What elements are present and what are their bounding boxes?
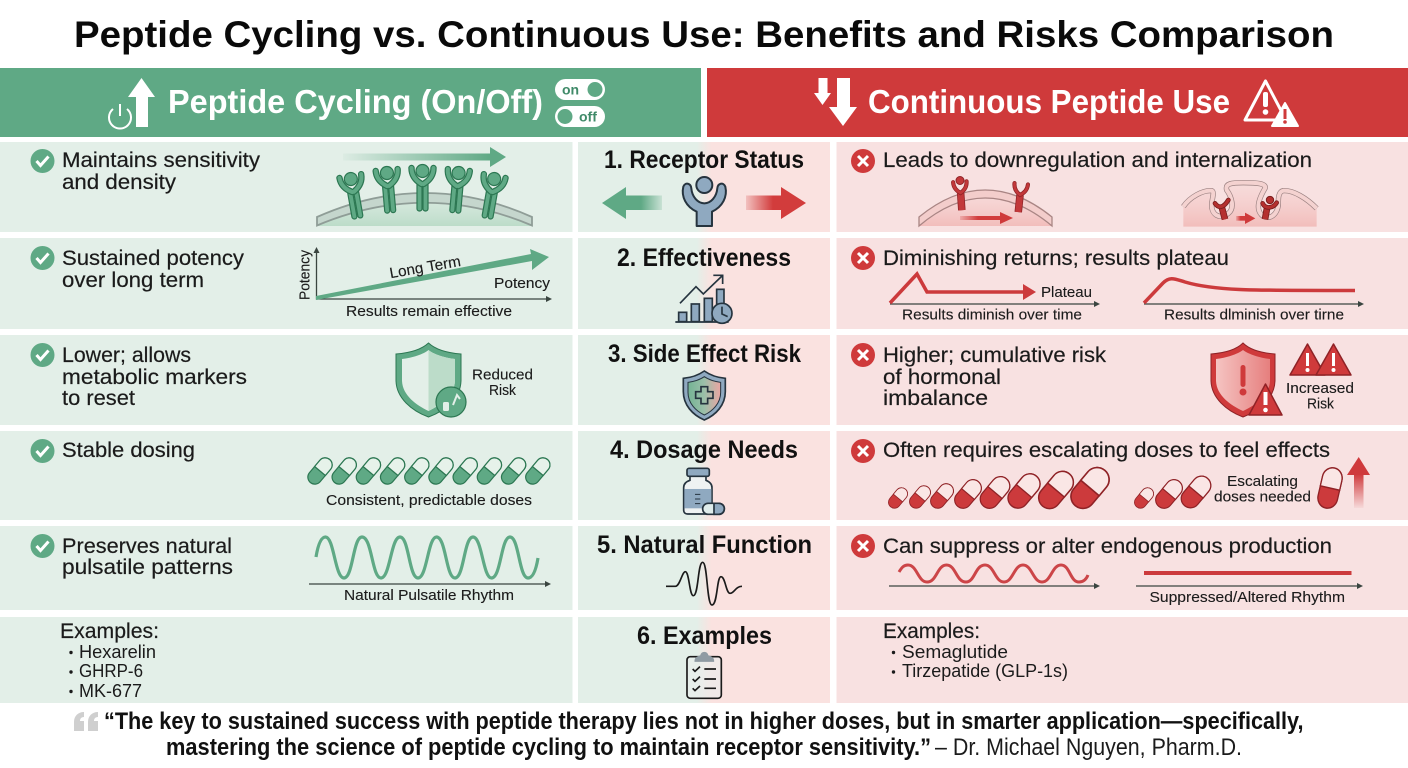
label: reduced risk: Reduced bbox=[472, 366, 533, 384]
chart: potency over long term bbox=[296, 247, 552, 320]
chart: potency over long term: Results remain effective bbox=[346, 303, 512, 320]
panel: cycling header bbox=[0, 68, 701, 137]
heading: side effect risk: 3. Side Effect Risk bbox=[608, 340, 801, 368]
icon: check bbox=[30, 343, 54, 367]
chart: plateau: Plateau bbox=[1041, 284, 1092, 301]
icon: cross bbox=[851, 246, 875, 270]
panel: cycling side effect risk bbox=[0, 335, 572, 425]
text: endogenous production: Can suppress or alter endogenous production bbox=[883, 534, 1332, 558]
panel: center effectiveness bbox=[578, 238, 830, 329]
icon: large capsule bbox=[1316, 466, 1344, 510]
icon: red shield bbox=[1211, 343, 1282, 417]
text: sensitivity: and density bbox=[62, 170, 176, 194]
icon: pulse wave bbox=[666, 562, 742, 605]
panel: cycling effectiveness bbox=[0, 238, 572, 329]
text: escalating doses: Often requires escalating doses to feel effects bbox=[883, 438, 1330, 462]
heading: dosage needs: 4. Dosage Needs bbox=[610, 436, 798, 464]
text: pulsatile patterns: pulsatile patterns bbox=[62, 555, 233, 579]
chart: natural pulsatile wave bbox=[309, 537, 551, 604]
chart: diminishing curve: Results dlminish over tirne bbox=[1164, 306, 1344, 324]
panel: cycling dosage bbox=[0, 431, 572, 520]
text: diminishing returns: Diminishing returns; results plateau bbox=[883, 246, 1229, 270]
icon: check bbox=[30, 149, 54, 173]
label: escalating doses needed bbox=[1214, 473, 1311, 506]
panel: cycling examples bbox=[0, 617, 572, 703]
heading: natural function: 5. Natural Function bbox=[597, 531, 812, 559]
panel: continuous effectiveness bbox=[836, 238, 1408, 329]
icon: on toggle bbox=[555, 79, 605, 100]
text: downregulation: Leads to downregulation and internalization bbox=[883, 148, 1312, 172]
text: higher risk: of hormonal bbox=[883, 365, 1001, 389]
icon: up arrow bbox=[128, 78, 155, 127]
text: sensitivity bbox=[62, 148, 260, 194]
quote: – Dr. Michael Nguyen, Pharm.D. bbox=[935, 734, 1242, 761]
icon: warning triangles bbox=[1245, 81, 1298, 126]
text: lower risk: Lower; allows bbox=[62, 343, 191, 367]
icon: growing capsules bbox=[886, 463, 1114, 513]
panel: continuous side effect risk bbox=[836, 335, 1408, 425]
icon: green shield bbox=[396, 343, 466, 417]
icon: bottle and pill bbox=[684, 468, 724, 514]
panel: center examples bbox=[578, 617, 830, 703]
chart: suppressed flat line bbox=[1136, 571, 1363, 606]
chart: suppressed flat line: Suppressed/Altered Rhythm bbox=[1150, 589, 1345, 606]
icon: three capsules bbox=[1132, 472, 1215, 512]
panel: center natural function bbox=[578, 526, 830, 610]
panel: continuous header bbox=[707, 68, 1408, 137]
text: pulsatile patterns bbox=[62, 534, 233, 579]
label: reduced risk: Risk bbox=[489, 382, 516, 399]
panel: center side effect risk bbox=[578, 335, 830, 425]
heading: examples: 6. Examples bbox=[637, 622, 772, 650]
icon: check bbox=[30, 439, 54, 463]
icon: power symbol bbox=[109, 104, 131, 128]
panel: cycling receptor status bbox=[0, 142, 572, 232]
illustration: receptor internalization bbox=[1183, 183, 1317, 227]
icon: check bbox=[30, 534, 54, 558]
icon: on toggle: on bbox=[562, 82, 579, 98]
panel: continuous dosage bbox=[836, 431, 1408, 520]
icon: warning triangles bbox=[1290, 344, 1351, 375]
panel: continuous receptor status bbox=[836, 142, 1408, 232]
icon: receptor bbox=[683, 177, 726, 226]
label: escalating doses needed: doses needed bbox=[1214, 488, 1311, 506]
text: lower risk: metabolic markers bbox=[62, 365, 247, 389]
list: cycling examples bbox=[69, 641, 156, 701]
arrow: up escalation bbox=[1347, 457, 1370, 508]
text: higher risk: imbalance bbox=[883, 386, 988, 410]
icon: growth chart with clock bbox=[675, 275, 732, 323]
icon: cross bbox=[851, 343, 875, 367]
icon: row of equal capsules bbox=[305, 455, 553, 487]
quote bbox=[104, 708, 1304, 761]
heading: continuous: Continuous Peptide Use bbox=[868, 83, 1230, 120]
label: reduced risk bbox=[472, 366, 533, 399]
heading: effectiveness: 2. Effectiveness bbox=[617, 244, 791, 272]
chart: plateau bbox=[890, 274, 1100, 324]
list: cycling examples: GHRP-6 bbox=[79, 660, 143, 681]
chart: natural pulsatile wave: Natural Pulsatile Rhythm bbox=[344, 587, 514, 604]
label: escalating doses needed: Escalating bbox=[1227, 473, 1298, 490]
label: increased risk bbox=[1286, 380, 1354, 412]
text: examples heading: Examples: bbox=[883, 619, 980, 643]
list: cycling examples: Hexarelin bbox=[79, 641, 156, 662]
illustration: receptors on membrane bbox=[317, 164, 532, 226]
label: increased risk: Risk bbox=[1307, 396, 1334, 412]
text: higher risk: Higher; cumulative risk bbox=[883, 343, 1106, 367]
text: potency: Sustained potency bbox=[62, 246, 244, 270]
label: predictable doses: Consistent, predictable doses bbox=[326, 492, 532, 509]
list: continuous examples: Semaglutide bbox=[902, 641, 1008, 662]
chart: potency over long term: Long Term bbox=[388, 253, 462, 282]
icon: medical shield bbox=[683, 371, 725, 420]
chart: potency over long term: Potency bbox=[494, 275, 551, 292]
arrow: left green bbox=[602, 187, 662, 219]
text: stable dosing: Stable dosing bbox=[62, 438, 195, 462]
list: cycling examples: MK-677 bbox=[79, 680, 142, 701]
icon: down arrows bbox=[814, 78, 857, 126]
chart: potency over long term: Potency bbox=[296, 250, 314, 300]
arrow: right red bbox=[746, 187, 806, 219]
icon: cross bbox=[851, 534, 875, 558]
text: lower risk bbox=[62, 343, 247, 410]
heading: receptor status: 1. Receptor Status bbox=[604, 146, 804, 174]
icon: cross bbox=[851, 439, 875, 463]
icon: off toggle: off bbox=[579, 108, 597, 124]
panel: continuous examples bbox=[836, 617, 1408, 703]
title: Peptide Cycling vs. Continuous Use: Benefits and Risks Comparison bbox=[74, 14, 1334, 55]
icon: check bbox=[30, 246, 54, 270]
panel: cycling natural function bbox=[0, 526, 572, 610]
text: potency: over long term bbox=[62, 268, 204, 292]
panel: center receptor status bbox=[578, 142, 830, 232]
label: increased risk: Increased bbox=[1286, 380, 1354, 397]
chart: diminishing curve bbox=[1144, 279, 1364, 324]
chart: plateau: Results diminish over time bbox=[902, 306, 1082, 324]
icon: off toggle bbox=[555, 106, 605, 127]
text: potency bbox=[62, 246, 244, 292]
heading: cycling: Peptide Cycling (On/Off) bbox=[168, 83, 543, 120]
text: examples heading: Examples: bbox=[60, 619, 159, 643]
list: continuous examples bbox=[892, 641, 1068, 681]
chart: weak wave bbox=[889, 565, 1100, 589]
text: higher risk bbox=[883, 343, 1106, 410]
panel: continuous natural function bbox=[836, 526, 1408, 610]
icon: quotation mark bbox=[74, 712, 98, 731]
text: lower risk: to reset bbox=[62, 386, 135, 410]
quote: mastering the science of peptide cycling to maintain receptor sensitivity.” bbox=[166, 734, 931, 761]
text: pulsatile patterns: Preserves natural bbox=[62, 534, 232, 558]
list: continuous examples: Tirzepatide (GLP-1s) bbox=[902, 660, 1068, 681]
icon: clipboard bbox=[687, 653, 721, 698]
text: sensitivity: Maintains sensitivity bbox=[62, 148, 260, 172]
panel: center dosage bbox=[578, 431, 830, 520]
arrow: receptor trend bbox=[343, 147, 506, 167]
icon: cross bbox=[851, 149, 875, 173]
illustration: membrane with few receptors bbox=[919, 176, 1052, 226]
